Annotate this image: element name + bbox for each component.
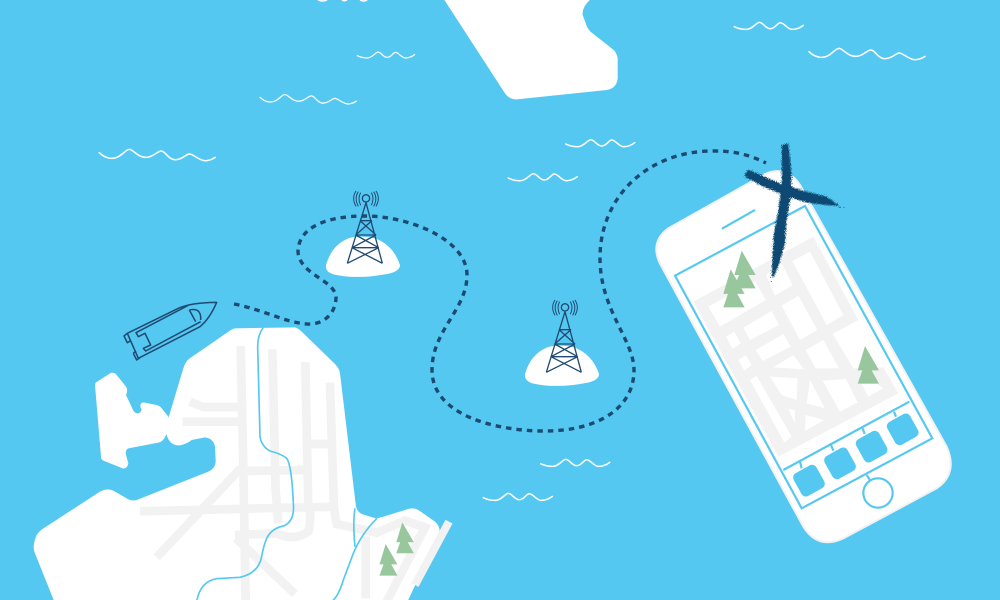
app buttons [791, 412, 920, 498]
roads [140, 346, 449, 600]
island with radio tower 2 [525, 300, 599, 386]
landmass: top island [443, 0, 618, 99]
screen frame, speaker and buttons [675, 206, 932, 508]
X mark [744, 143, 844, 282]
phone body [656, 171, 951, 542]
river east [332, 508, 377, 600]
river west [197, 327, 294, 600]
map on screen [693, 237, 898, 457]
route: dashed line [234, 151, 766, 431]
phone [656, 143, 951, 542]
island with radio tower 1 [326, 191, 400, 277]
trees [380, 522, 414, 576]
boat [124, 302, 217, 360]
landmass: mainland with roads and rivers [34, 327, 449, 600]
trees on phone [723, 251, 879, 384]
waves [99, 0, 925, 500]
